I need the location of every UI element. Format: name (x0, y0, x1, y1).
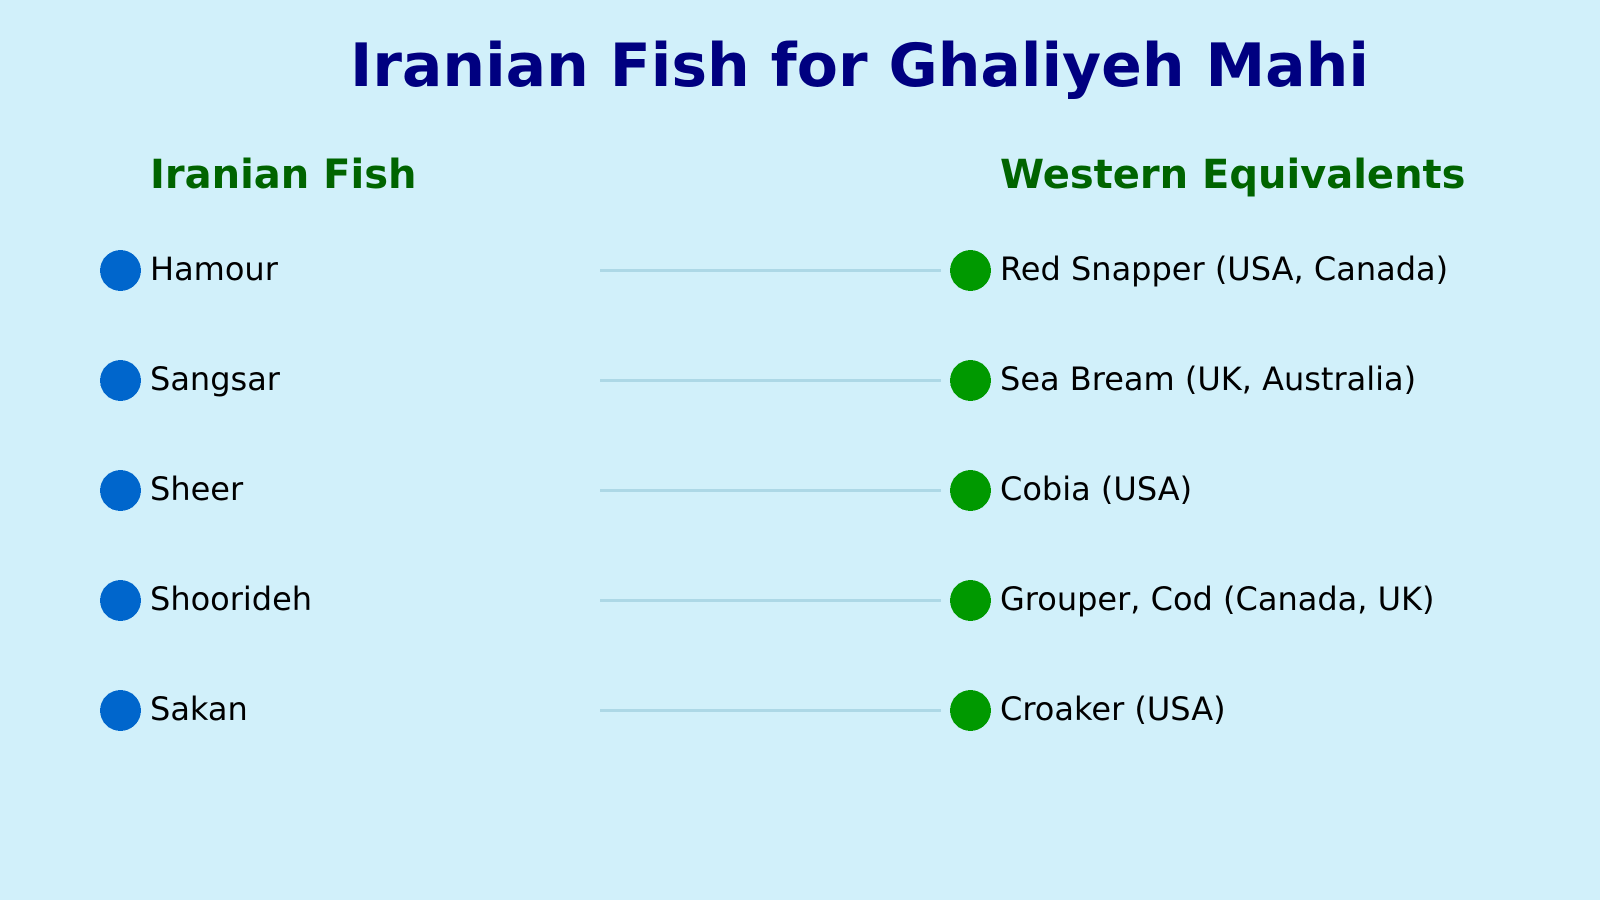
row: Sakan to Croaker (100, 690, 1226, 731)
icon: blue dot (100, 360, 141, 401)
row: Sheer to Cobia (100, 470, 1192, 511)
icon: blue dot (100, 580, 141, 621)
icon: green dot (950, 360, 991, 401)
title: Iranian Fish for Ghaliyeh Mahi (350, 31, 1369, 101)
icon: green dot (950, 580, 991, 621)
connector line (600, 709, 941, 712)
heading: Iranian Fish: Iranian Fish (150, 152, 417, 198)
label: Grouper, Cod: Grouper, Cod (Canada, UK) (1000, 580, 1434, 618)
row: Shoorideh to Grouper, Cod (100, 580, 1434, 621)
heading: Western Equivalents: Western Equivalents (1000, 152, 1465, 198)
connector line (600, 379, 941, 382)
connector line (600, 489, 941, 492)
label: Hamour: Hamour (150, 250, 279, 288)
label: Cobia: Cobia (USA) (1000, 470, 1192, 508)
label: Sakan: Sakan (150, 690, 248, 728)
icon: green dot (950, 690, 991, 731)
icon: blue dot (100, 470, 141, 511)
icon: green dot (950, 250, 991, 291)
label: Shoorideh: Shoorideh (150, 580, 312, 618)
icon: green dot (950, 470, 991, 511)
label: Sangsar: Sangsar (150, 360, 281, 398)
label: Red Snapper: Red Snapper (USA, Canada) (1000, 250, 1448, 288)
row: Sangsar to Sea Bream (100, 360, 1416, 401)
icon: blue dot (100, 690, 141, 731)
connector line (600, 269, 941, 272)
label: Croaker: Croaker (USA) (1000, 690, 1226, 728)
row: Hamour to Red Snapper (100, 250, 1448, 291)
label: Sheer: Sheer (150, 470, 244, 508)
label: Sea Bream: Sea Bream (UK, Australia) (1000, 360, 1416, 398)
icon: blue dot (100, 250, 141, 291)
connector line (600, 599, 941, 602)
